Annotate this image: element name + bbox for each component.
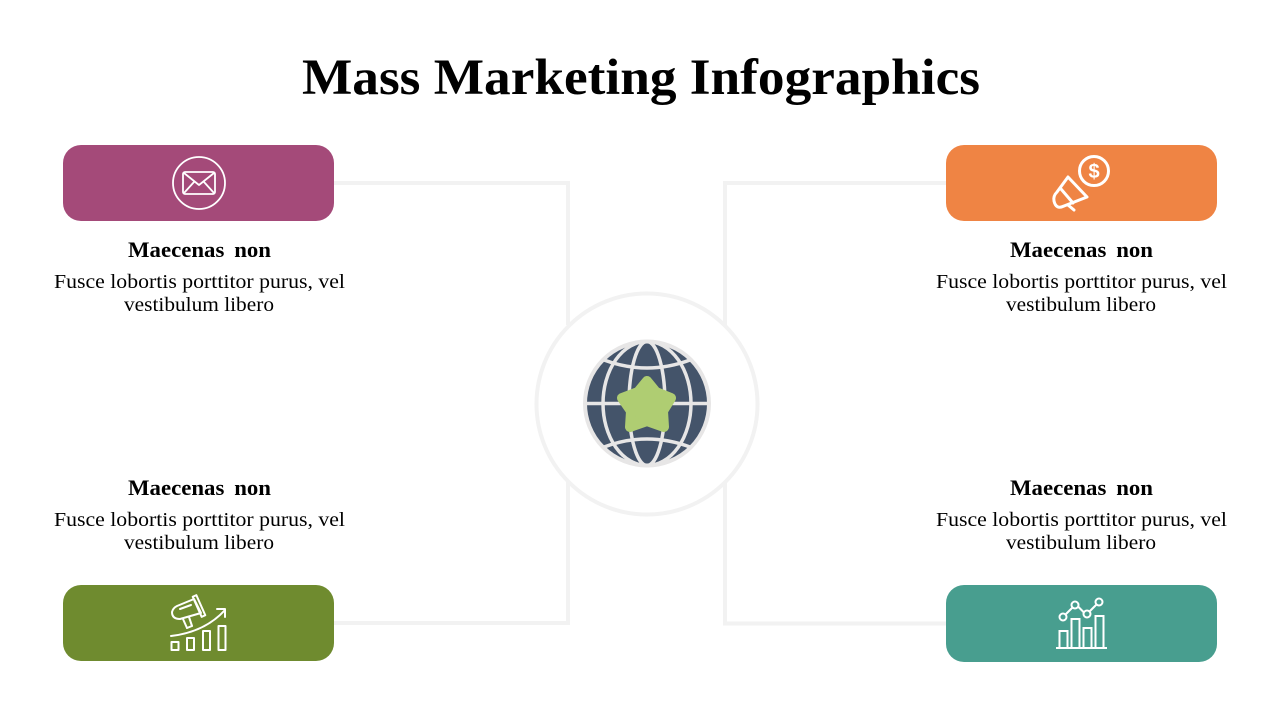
heading: Maecenas non — [1010, 475, 1153, 500]
heading: Maecenas non — [128, 237, 271, 262]
icon: globe with star — [585, 342, 709, 466]
heading: Maecenas non — [1010, 237, 1153, 262]
body text — [54, 271, 345, 316]
title: Mass Marketing Infographics — [302, 50, 980, 106]
body text: vestibulum libero — [1006, 532, 1156, 554]
connector: top left — [334, 183, 568, 325]
connector: top right — [725, 183, 946, 325]
body text: Fusce lobortis porttitor purus, vel — [936, 509, 1227, 531]
connector: bottom left — [334, 482, 568, 623]
body text: vestibulum libero — [124, 532, 274, 554]
icon: megaphone with dollar coin — [1054, 156, 1108, 210]
panel: top left — [54, 145, 345, 316]
icon: bar and line chart — [1056, 598, 1107, 648]
card: orange — [946, 145, 1217, 221]
body text — [54, 509, 345, 554]
connector: bottom right — [725, 482, 946, 624]
icon: megaphone with rising bars — [171, 595, 226, 650]
body text: Fusce lobortis porttitor purus, vel — [54, 271, 345, 293]
card: plum — [63, 145, 334, 221]
panel: bottom right — [936, 475, 1227, 662]
card: teal — [946, 585, 1217, 662]
heading: Maecenas non — [128, 475, 271, 500]
body text: vestibulum libero — [124, 294, 274, 316]
icon: envelope — [173, 157, 225, 209]
body text: Fusce lobortis porttitor purus, vel — [936, 271, 1227, 293]
body text: Fusce lobortis porttitor purus, vel — [54, 509, 345, 531]
panel: bottom left — [54, 475, 345, 661]
body text: vestibulum libero — [1006, 294, 1156, 316]
card: green — [63, 585, 334, 661]
icon: megaphone with dollar coin: $ — [1088, 161, 1100, 183]
central ring — [536, 294, 758, 514]
panel: top right — [936, 145, 1227, 316]
body text — [936, 509, 1227, 554]
body text — [936, 271, 1227, 316]
